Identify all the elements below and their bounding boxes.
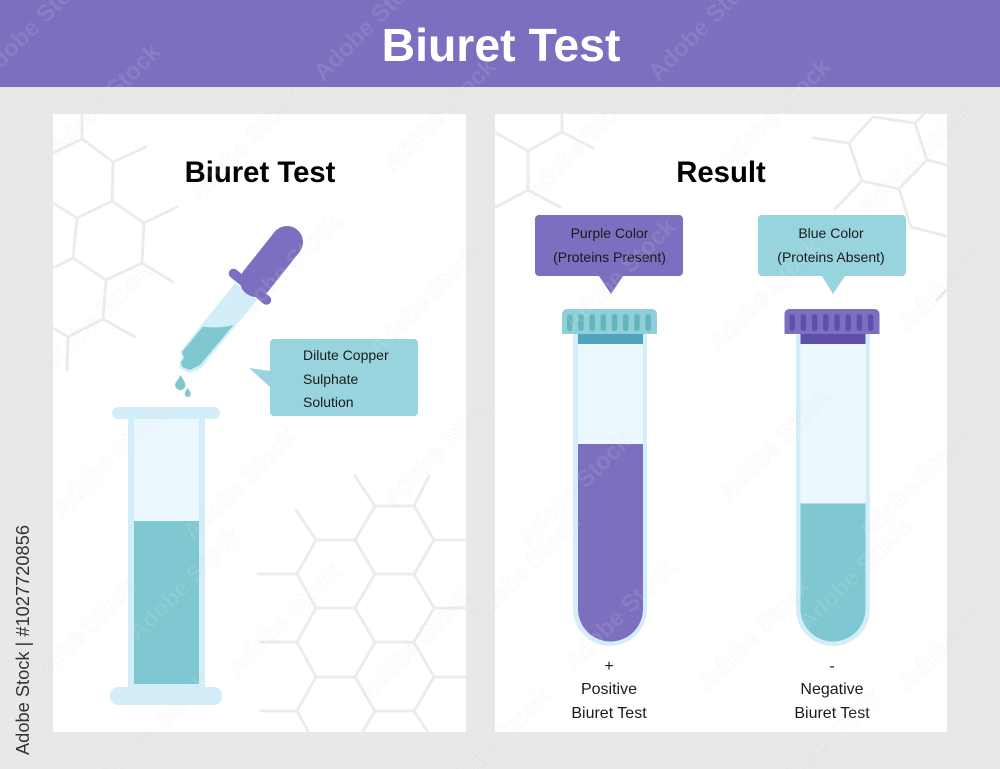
watermarks: Adobe Stock [223,558,347,681]
hexagon background: top left [496,115,593,207]
tube empty interior [800,344,866,504]
watermarks: Adobe Stock [463,508,587,631]
cylinder rim [112,407,220,419]
tube glass [573,334,647,646]
callout: purple color: Purple Color [571,225,649,241]
watermarks: Adobe Stock [518,83,642,206]
stock image id: Adobe Stock | #1027720856 [12,525,33,755]
watermarks: Adobe Stock [353,583,477,706]
tube purple liquid [578,444,643,642]
watermarks: Adobe Stock [558,553,682,676]
watermarks: Adobe Stock [558,213,682,336]
callout: dilute copper sulphate solution: Solution [303,394,354,410]
watermarks: Adobe Stock [378,53,502,176]
callout: dilute copper sulphate solution: Dilute Copper [303,347,389,363]
callout: blue color: (Proteins Absent) [777,249,885,265]
panel: result [495,114,947,732]
watermarks: Adobe Stock [183,83,307,206]
label: positive biuret test [571,658,647,722]
watermarks: Adobe Stock [713,383,837,506]
tube cap [562,309,657,334]
cap ribs [790,314,873,331]
dropper collar [234,274,266,300]
watermarks: Adobe Stock [18,573,142,696]
watermarks: Adobe Stock [223,208,347,331]
liquid drops [175,375,191,397]
dropper bulb base [243,266,272,294]
watermarks: Adobe Stock [48,398,172,521]
label: negative biuret test [794,658,870,722]
hexagon background: top right [813,115,947,300]
tube cap [784,309,880,334]
watermarks: Adobe Stock [703,233,827,356]
watermarks: Adobe Stock [853,423,977,546]
label: negative biuret test: Biuret Test [794,705,870,722]
watermarks: Adobe Stock [363,238,487,361]
watermarks: Adobe Stock [33,258,157,381]
tube glass [796,334,870,646]
tube blue liquid [800,504,866,642]
cylinder base [110,687,222,705]
watermarks: Adobe Stock [378,388,502,511]
watermarks: Adobe Stock [513,428,637,551]
hexagon background: bottom right [258,476,466,731]
header banner: Biuret Test [382,19,620,71]
header banner [0,0,1000,87]
dropper liquid [181,325,234,370]
callout: dilute copper sulphate solution [249,339,418,416]
callout: purple color [535,215,683,294]
label: negative biuret test: Negative [800,681,864,698]
watermarks: Adobe Stock [793,513,917,636]
icon: dropper [175,242,287,397]
watermarks: Adobe Stock [853,98,977,221]
dropper glass [179,283,257,373]
panel heading: Result [676,156,766,189]
cap ribs [567,314,651,331]
callout: dilute copper sulphate solution: Sulphate [303,371,358,387]
watermarks: Adobe Stock [43,38,167,161]
test tube: negative [784,309,880,646]
dropper rubber bulb [256,242,287,281]
label: positive biuret test: + [604,658,614,675]
tube neck [800,334,866,344]
graduated cylinder [110,407,222,705]
panel heading: Biuret Test [185,156,336,189]
tube neck [578,334,643,344]
callout: blue color [758,215,906,294]
panel: biuret test procedure [53,114,466,732]
watermarks: Adobe Stock [713,53,837,176]
tube empty interior [578,344,643,444]
cylinder empty interior [134,419,199,521]
watermarks: Adobe Stock [123,523,247,646]
test tube: positive [562,309,657,646]
hexagon background: top left [53,115,177,370]
watermarks: Adobe Stock [178,423,302,546]
watermarks: Adobe Stock [693,573,817,696]
label: negative biuret test: - [829,658,835,675]
cylinder glass [128,412,205,692]
callout: blue color: Blue Color [798,225,864,241]
cylinder liquid [134,521,199,684]
callout: purple color: (Proteins Present) [553,249,666,265]
label: positive biuret test: Biuret Test [571,705,647,722]
label: positive biuret test: Positive [581,681,637,698]
